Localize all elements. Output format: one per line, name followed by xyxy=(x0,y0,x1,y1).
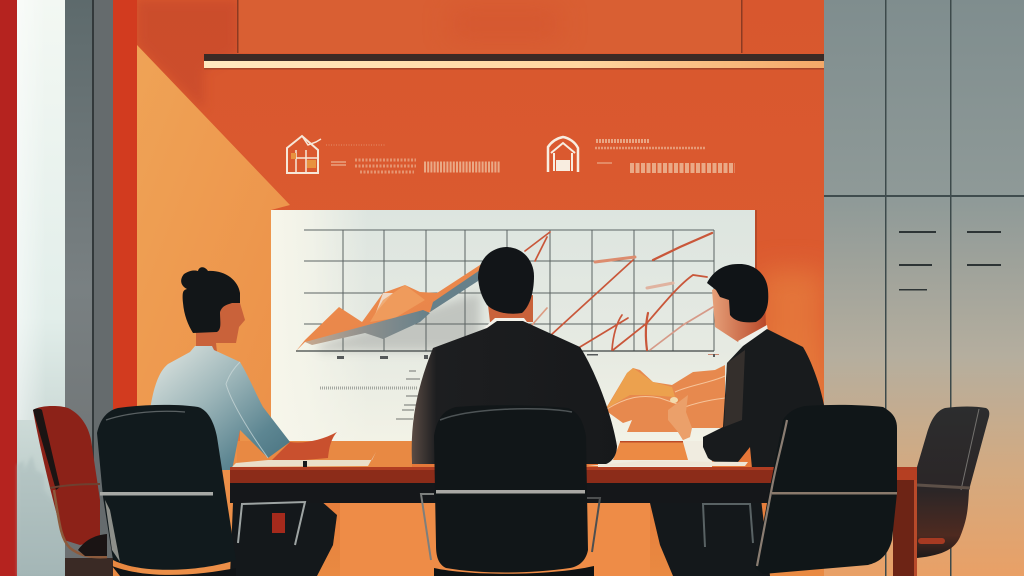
person: man on right xyxy=(650,264,824,576)
hair xyxy=(478,247,534,314)
wall caption: right heading block xyxy=(595,141,735,168)
panel: left wall and window xyxy=(0,0,113,576)
chair arm: front left chair xyxy=(238,502,305,545)
chart axis tick labels xyxy=(337,354,719,359)
neck xyxy=(488,295,533,322)
legs xyxy=(650,490,770,576)
shirt xyxy=(150,346,290,470)
chair: black chair centre xyxy=(421,405,600,576)
shirt collar xyxy=(738,325,768,350)
person: man in centre xyxy=(412,247,617,464)
chair: dark chair far right xyxy=(917,406,989,558)
panel: orange back wall xyxy=(113,0,824,576)
icon: house with arched roof, right xyxy=(548,137,578,172)
hand xyxy=(272,432,337,461)
line chart grid xyxy=(296,230,714,351)
neck and face xyxy=(196,300,245,352)
chart: lower orange relief map xyxy=(605,365,725,440)
small caption lines on the board xyxy=(320,371,420,419)
icon: house with roof line, left xyxy=(287,136,321,173)
table xyxy=(230,467,935,576)
chair: black chair front left xyxy=(97,405,236,576)
panel: presentation board xyxy=(271,210,757,441)
chair: red chair far left xyxy=(33,406,107,557)
legs xyxy=(230,500,337,576)
documents on table xyxy=(232,452,748,467)
collar xyxy=(484,318,530,328)
chart: area shading under peaks xyxy=(318,292,480,351)
board base strip with orange inset xyxy=(598,441,712,467)
chart: red trend lines xyxy=(525,232,713,350)
face and neck xyxy=(712,280,766,342)
chair: black chair front right xyxy=(755,405,897,574)
chart: orange mountain area xyxy=(296,263,483,351)
suit xyxy=(412,321,617,464)
hair xyxy=(181,267,240,333)
person: woman on left xyxy=(150,267,337,576)
chair arm: right front chair xyxy=(703,504,753,547)
wall caption: left heading block xyxy=(326,145,500,172)
suit xyxy=(703,329,824,500)
hair xyxy=(707,264,768,322)
panel: grey cabinets on the right xyxy=(824,0,1024,576)
ceiling light bar xyxy=(204,54,824,70)
